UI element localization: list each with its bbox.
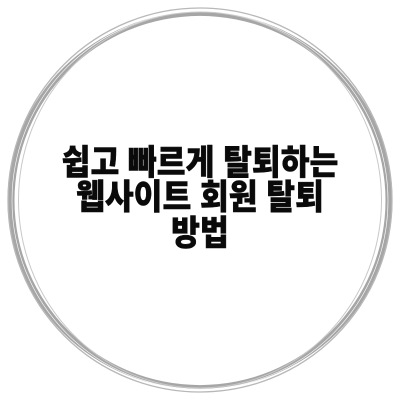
title xyxy=(62,143,338,252)
title: 방법 xyxy=(171,213,229,252)
title: 쉽고 빠르게 탈퇴하는 xyxy=(62,143,338,182)
title: 웹사이트 회원 탈퇴 xyxy=(76,178,324,217)
